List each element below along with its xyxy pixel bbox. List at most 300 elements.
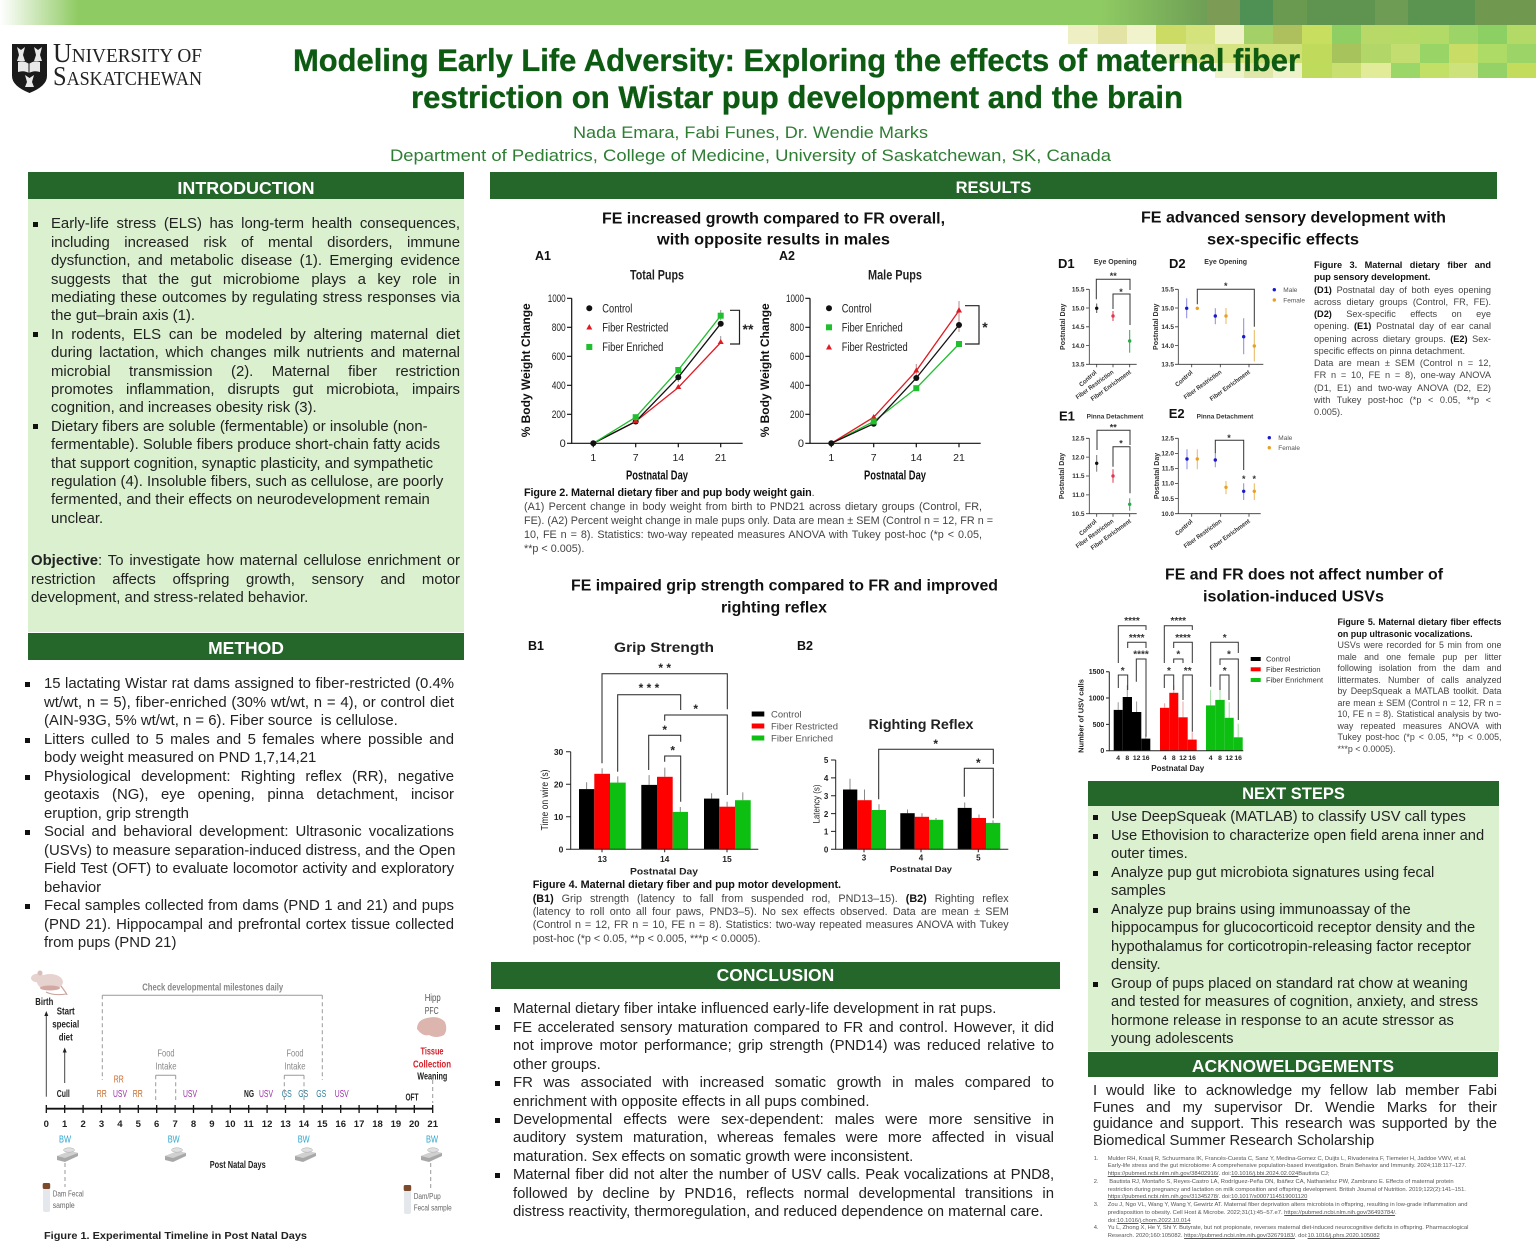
chart: A1 total pups: 0 <box>560 438 566 450</box>
chart: B2 righting reflex: 5 <box>824 756 829 765</box>
text: introduction bullets: unclear. <box>51 511 103 527</box>
chart: A1 total pups: Total Pups <box>630 266 684 282</box>
chart: USV calls: ** <box>1184 666 1192 677</box>
timeline arrows and labels: Birth <box>35 996 53 1008</box>
logo: University of Saskatchewan <box>12 38 202 93</box>
timeline arrows and labels: Intake <box>156 1060 177 1072</box>
text: introduction bullets: suggests that the gut microbiome plays a key role in <box>51 272 460 288</box>
chart: D1 eye opening: * <box>1119 287 1123 297</box>
timeline arrows and labels: BW <box>298 1134 310 1146</box>
heading: introduction: INTRODUCTION <box>177 178 315 198</box>
text: conclusion bullets: other groups. <box>513 1057 601 1073</box>
chart: B2 righting reflex: 5 <box>976 854 981 862</box>
chart: B1 grip strength: * <box>693 702 698 716</box>
chart: A1 total pups: % Body Weight Change <box>521 303 533 437</box>
caption: figure 5: 10, FE n = 8). Statistical analysis by two- <box>1338 709 1502 719</box>
timeline day numbers: 13 <box>280 1119 291 1130</box>
timeline arrows and labels: Fecal sample <box>414 1202 452 1212</box>
timeline arrows and labels: RR <box>133 1088 143 1100</box>
chart: B1 grip strength: * * <box>658 661 671 675</box>
chart: A2 male pups: 800 <box>790 322 804 334</box>
chart: A2 male pups: 0 <box>798 438 804 450</box>
chart: B1 grip strength: Time on wire (s) <box>539 770 551 830</box>
chart: USV calls: Control <box>1266 654 1291 664</box>
chart: A2 male pups: 200 <box>790 409 804 421</box>
chart: B2 righting reflex: Postnatal Day <box>890 864 952 874</box>
text: introduction bullets: mediating these outcomes by regulating stress responses via <box>51 290 460 306</box>
chart: B1 grip strength: Fiber Restricted <box>771 721 838 732</box>
chart: USV calls: **** <box>1129 633 1145 644</box>
timeline arrows and labels: Food <box>286 1048 304 1060</box>
chart: E1 pinna detachment: Control <box>1078 518 1099 538</box>
chart: A1 total pups: 21 <box>715 452 727 464</box>
timeline day numbers: 21 <box>427 1119 439 1130</box>
text: next steps bullets: hypothalamus for corticotropin-releasing factor receptor <box>1111 939 1471 955</box>
chart: B1 grip strength: 20 <box>554 780 564 790</box>
timeline arrows and labels: USV <box>259 1088 273 1100</box>
text: references: Mulder RH, Krasij R, Schuurmans IK, Francés-Cuesta C, Sanz Y, Medina-Gomez C, Duijts L, Rivadeneira F, Tiemeier H, Jaddoe VWV, et al. <box>1108 1156 1466 1162</box>
heading: introduction <box>28 172 464 199</box>
text: next steps bullets: density. <box>1111 957 1161 973</box>
text: method bullets: Field Test (OFT) to evaluate locomotor activity and exploratory <box>44 861 454 877</box>
chart: B1 grip strength: 0 <box>559 844 564 854</box>
caption: figure 3: across dietary groups (Control, FR, FE). <box>1314 297 1491 307</box>
chart: E1 pinna detachment: Fiber Restriction <box>1075 518 1115 550</box>
caption: figure 2: 10, FE n = 8). Statistics: two-way repeated measures ANOVA with Tukey post-hoc (*p < 0.05, <box>524 529 982 541</box>
chart: B1 grip strength: * <box>662 723 667 737</box>
text: next steps bullets: hippocampus for glucocorticoid receptor density and the <box>1111 920 1475 936</box>
chart: A2 male pups: A2 <box>779 249 795 263</box>
text: introduction bullets: microbial transmission (2). Maternal fiber restriction <box>51 364 460 380</box>
logo: University of Saskatchewan: SASKATCHEWAN <box>53 61 202 91</box>
chart: A1 total pups: Fiber Enriched <box>602 342 663 354</box>
chart: E2 pinna detachment by sex: Female <box>1278 445 1300 452</box>
text: acknowledgements: Biomedical Summer Research Scholarship <box>1093 1133 1374 1149</box>
chart: D1 eye opening <box>1058 256 1137 403</box>
chart: D1 eye opening: 15.5 <box>1072 286 1085 294</box>
chart: B2 righting reflex: Righting Reflex <box>868 717 974 732</box>
chart: D2 eye opening by sex: Eye Opening <box>1204 259 1247 266</box>
text: 4. <box>1094 1225 1099 1231</box>
heading: next steps <box>1088 781 1499 806</box>
text: references: Yu L, Zhong X, He Y, Shi Y. Butyrate, but not propionate, reverses maternal diet-induced neurocognitive deficits in offspring. Pharmacological <box>1108 1225 1468 1231</box>
chart: B1 grip strength: 13 <box>598 854 607 864</box>
chart: E2 pinna detachment by sex: 11.0 <box>1162 481 1174 488</box>
timeline arrows and labels: Post Natal Days <box>210 1159 266 1171</box>
chart: A2 male pups: 7 <box>871 452 877 464</box>
subheadings: FE impaired grip strength compared to FR and improved <box>571 578 998 594</box>
chart: A2 male pups: Male Pups <box>868 266 922 282</box>
chart: USV calls: Fiber Restriction <box>1266 665 1321 674</box>
timeline arrows and labels: Collection <box>413 1058 451 1070</box>
timeline arrows and labels: GS <box>282 1088 292 1100</box>
chart: A1 total pups: Control <box>602 304 632 316</box>
chart: B1 grip strength: B1 <box>528 639 544 653</box>
chart: A2 male pups: 1000 <box>786 293 804 305</box>
chart: A1 total pups: 1 <box>590 452 596 464</box>
text: objective <box>31 553 460 606</box>
text: conclusion bullets: auditory system maturation, whereas females were more affected in visual <box>513 1130 1054 1146</box>
panel: introduction <box>28 172 464 632</box>
subheadings: FE advanced sensory development with <box>1141 210 1446 226</box>
text: conclusion bullets: Developmental effects were sex-dependent: males were more sensitive in <box>513 1112 1054 1128</box>
chart: A2 male pups: 21 <box>953 452 965 464</box>
text: conclusion bullets: distress reactivity, thermoregulation, and reduced dependence on maternal care. <box>513 1204 1043 1220</box>
caption: figure 2: **p < 0.005). <box>524 543 584 555</box>
chart: USV calls: Postnatal Day <box>1151 764 1205 773</box>
chart: D2 eye opening by sex: 14.5 <box>1161 324 1174 331</box>
timeline arrows and labels: Dam/Pup <box>414 1191 441 1201</box>
text: references: https://pubmed.ncbi.nlm.nih.gov/31345278/. doi:10.1017/s0007114519001120 <box>1108 1194 1307 1200</box>
chart: B2 righting reflex: 1 <box>824 828 829 836</box>
chart: A1 total pups: Postnatal Day <box>626 468 688 482</box>
text: next steps bullets: outer times. <box>1111 846 1188 862</box>
text: method bullets: Litters culled to 5 males and 5 females where possible and <box>44 732 454 748</box>
subheadings: FE increased growth compared to FR overall, <box>602 210 945 228</box>
text: method bullets <box>25 676 455 951</box>
chart: A1 total pups: A1 <box>535 249 551 263</box>
chart: A1 total pups: 400 <box>552 380 566 392</box>
timeline axis <box>46 1105 433 1113</box>
text: conclusion bullets: enrichment with opposite effects in all pups combined. <box>513 1094 869 1110</box>
chart: D1 eye opening: ** <box>1110 271 1117 281</box>
chart: E2 pinna detachment by sex: 10.0 <box>1161 511 1174 518</box>
chart: USV calls: 8 <box>1125 755 1129 762</box>
timeline arrows and labels: Check developmental milestones daily <box>142 982 283 994</box>
chart: E2 pinna detachment by sex: Postnatal Day <box>1154 453 1161 499</box>
text: introduction bullets: promotes inflammation, disrupts gut microbiota, impairs <box>51 382 460 398</box>
chart: D1 eye opening: Eye Opening <box>1094 259 1137 266</box>
chart: USV calls: * <box>1223 633 1227 644</box>
chart: USV calls: 4 <box>1116 755 1120 762</box>
chart: D2 eye opening by sex: Fiber Restriction <box>1183 369 1223 401</box>
timeline arrows and labels: GS <box>298 1088 308 1100</box>
chart: E1 pinna detachment: ** <box>1110 422 1117 432</box>
caption: figure 1: Figure 1. Experimental Timeline in Post Natal Days <box>44 1230 307 1242</box>
timeline arrows and labels: Cull <box>57 1088 70 1100</box>
chart: A2 male pups: 14 <box>910 452 922 464</box>
timeline day numbers: 2 <box>80 1119 86 1130</box>
text: introduction bullets: during lactation, which changes milk nutrients and maternal <box>51 345 460 361</box>
chart: B1 grip strength: Grip Strength <box>614 640 714 655</box>
timeline day numbers: 8 <box>191 1119 196 1130</box>
text: method bullets: Fecal samples collected from dams (PND 1 and 21) and pups <box>44 898 454 914</box>
chart: E1 pinna detachment: 12.5 <box>1072 436 1085 442</box>
timeline day numbers: 16 <box>335 1119 346 1130</box>
caption: figure 4 <box>533 879 1009 945</box>
timeline arrows and labels: USV <box>183 1088 197 1100</box>
chart: A2 male pups: 1 <box>828 452 834 464</box>
chart: B2 righting reflex: Latency (s) <box>812 784 822 824</box>
chart: A1 total pups: Fiber Restricted <box>602 322 668 334</box>
timeline arrows and labels: PFC <box>425 1005 439 1017</box>
timeline day numbers: 10 <box>225 1119 236 1130</box>
timeline arrows and labels: RR <box>97 1088 107 1100</box>
chart: A1 total pups: 1000 <box>548 293 566 305</box>
caption: figure 4: (Control n = 12, FR n = 10, FE n = 8). Statistics: two-way repeated measures ANOVA with Tukey <box>533 919 1009 931</box>
panel: next steps <box>1088 781 1499 1051</box>
caption: figure 5: ***p < 0.0005). <box>1338 744 1395 754</box>
chart: A1 total pups: 800 <box>552 322 566 334</box>
caption: figure 2: (A1) Percent change in body weight from birth to PND21 across dietary groups (Control, FR, <box>524 501 982 513</box>
chart: B2 righting reflex: 0 <box>824 846 829 854</box>
chart: D1 eye opening: 14.0 <box>1072 343 1085 350</box>
text: objective: Objective: To investigate how maternal cellulose enrichment or <box>31 553 460 569</box>
timeline arrows and labels: Dam Fecal <box>53 1188 84 1198</box>
text: next steps bullets: Use Ethovision to characterize open field arena inner and <box>1111 828 1484 844</box>
caption: figure 5: are mean ± SEM (Control n = 12, FR n = <box>1338 698 1502 708</box>
text: references: Bautista RJ, Montaño S, Reyes-Castro LA, Rodríguez-Peña ON, Ibáñez CA, Nathanielsz PW, Zambrano E. Effects of maternal protein <box>1109 1179 1454 1185</box>
caption: figure 3: specific effects on pinna detachment. <box>1314 346 1465 356</box>
chart: B2 righting reflex: 4 <box>919 854 924 862</box>
chart: D1 eye opening: 14.5 <box>1072 324 1085 331</box>
caption: figure 5: Tukey post-hoc (*p < 0.05, **p < 0.005, <box>1338 732 1502 742</box>
timeline arrows and labels: OFT <box>406 1092 419 1104</box>
text: introduction bullets: Dietary fibers are soluble (fermentable) or insoluble (non- <box>51 419 428 435</box>
chart: E2 pinna detachment by sex: * <box>1227 433 1231 443</box>
caption: figure 3: (D1, E1) and two-way ANOVA (D2, E2) <box>1314 382 1491 392</box>
chart: D2 eye opening by sex: Fiber Enrichment <box>1209 368 1252 403</box>
authors and affiliation: Nada Emara, Fabi Funes, Dr. Wendie Marks <box>573 123 928 142</box>
text: references: Early-life stress and the gut microbiome: A comprehensive population-based investigation. Brain Behavior and Immunity. 2024;118:117–127. <box>1108 1163 1466 1169</box>
chart: USV calls: * <box>1223 666 1227 677</box>
timeline arrows and labels: RR <box>114 1074 124 1086</box>
chart: A2 male pups: Fiber Enriched <box>842 322 903 334</box>
chart: USV calls: * <box>1176 649 1180 660</box>
caption: figure 5 <box>1338 617 1502 754</box>
chart: USV calls: 1000 <box>1089 696 1104 702</box>
timeline arrows and labels: BW <box>426 1134 438 1146</box>
chart: D1 eye opening: Control <box>1078 369 1099 389</box>
timeline arrows and labels: NG <box>244 1088 254 1100</box>
chart: D2 eye opening by sex <box>1153 256 1305 403</box>
authors and affiliation <box>390 123 1112 165</box>
chart: E2 pinna detachment by sex: Pinna Detachment <box>1197 414 1254 420</box>
heading: results <box>490 172 1497 199</box>
chart: E1 pinna detachment <box>1059 408 1144 552</box>
chart: USV calls: 500 <box>1093 722 1104 729</box>
timeline day numbers: 7 <box>172 1119 178 1130</box>
text: method bullets: behavior <box>44 880 101 896</box>
chart: USV calls: 8 <box>1218 755 1222 762</box>
chart: D2 eye opening by sex: Male <box>1283 287 1298 294</box>
chart: B2 righting reflex: 3 <box>824 792 829 801</box>
subheadings: sex-specific effects <box>1207 232 1359 248</box>
chart: D2 eye opening by sex: Control <box>1174 369 1195 389</box>
text: introduction bullets: cognition, and increases obesity risk (3). <box>51 400 317 416</box>
chart: E2 pinna detachment by sex: 11.5 <box>1162 466 1174 472</box>
caption: figure 3: (D2) Sex-specific effects on eye <box>1314 309 1491 319</box>
heading: conclusion <box>491 962 1060 988</box>
authors and affiliation: Department of Pediatrics, College of Medicine, University of Saskatchewan, SK, Canada <box>390 146 1112 165</box>
caption: figure 5: on pup ultrasonic vocalizations. <box>1338 628 1473 638</box>
timeline day numbers: 15 <box>317 1119 328 1130</box>
timeline day numbers: 4 <box>117 1119 123 1130</box>
chart: E1 pinna detachment: E1 <box>1059 408 1075 424</box>
milestone brackets <box>65 995 433 1188</box>
chart: USV calls: **** <box>1133 649 1149 660</box>
heading: method: METHOD <box>208 638 284 658</box>
chart: A2 male pups: * <box>982 319 988 335</box>
text: method bullets: (USVs) to measure separation-induced distress, and the Open <box>44 843 455 859</box>
chart: USV calls: **** <box>1124 616 1140 627</box>
chart: B2 righting reflex: * <box>933 737 938 751</box>
timeline arrows and labels: USV <box>335 1088 349 1100</box>
chart: E2 pinna detachment by sex <box>1154 406 1300 552</box>
heading: conclusion: CONCLUSION <box>717 964 834 984</box>
chart: D1 eye opening: D1 <box>1058 256 1075 271</box>
text: references: restriction during pregnancy and lactation on milk composition and offspring development. British Journal of Nutrition. 2019;122(2):141–151. <box>1108 1187 1466 1193</box>
mosaic decoration <box>1068 25 1536 78</box>
chart: B1 grip strength: 14 <box>660 854 670 864</box>
text: 2. <box>1094 1179 1099 1185</box>
text: method bullets: geotaxis (NG), eye opening, pinna detachment, incisor <box>44 787 454 803</box>
text: next steps bullets: Use DeepSqueak (MATLAB) to classify USV call types <box>1111 809 1466 825</box>
text: 3. <box>1094 1202 1099 1208</box>
text: acknowledgements: Funes and my supervisor Dr. Wendie Marks for their <box>1093 1100 1497 1116</box>
caption: figure 4: (B1) Grip strength (latency to fall from suspended rod, PND13–15). (B2) Righting reflex <box>533 893 1009 905</box>
heading: method <box>28 633 464 660</box>
chart: USV calls: 4 <box>1163 755 1167 762</box>
title <box>293 42 1300 115</box>
chart: A2 male pups: Control <box>842 304 872 316</box>
caption: figure 3: opening across dietary groups. (E2) Sex- <box>1314 334 1491 344</box>
text: introduction bullets: Early-life stress (ELS) has long-term health consequences, <box>51 216 460 232</box>
text: method bullets: Social and behavioral development: Ultrasonic vocalizations <box>44 824 454 840</box>
caption: figure 3: (D1) Postnatal day of both eyes opening <box>1314 284 1491 294</box>
text: introduction bullets: fermented, and their effects on neurodevelopment remain <box>51 492 430 508</box>
timeline arrows and labels: BW <box>168 1134 180 1146</box>
text: method bullets: body weight measured on PND 1,7,14,21 <box>44 750 316 766</box>
timeline day numbers: 5 <box>136 1119 142 1130</box>
chart: E2 pinna detachment by sex: 12.5 <box>1161 436 1174 442</box>
chart: E2 pinna detachment by sex: Male <box>1278 435 1293 442</box>
text: next steps bullets: and tested for measures of cognition, anxiety, and stress <box>1111 994 1478 1010</box>
chart: USV calls: 16 <box>1142 755 1150 762</box>
chart: E1 pinna detachment: Postnatal Day <box>1059 453 1066 499</box>
chart: D2 eye opening by sex: 14.0 <box>1161 343 1174 350</box>
chart: USV calls: **** <box>1171 616 1186 627</box>
logo: University of Saskatchewan: UNIVERSITY OF <box>53 38 202 68</box>
chart: USV calls: 12 <box>1133 755 1141 762</box>
timeline day numbers: 9 <box>209 1119 215 1130</box>
chart: A2 male pups: Fiber Restricted <box>842 342 908 354</box>
chart: D2 eye opening by sex: 15.5 <box>1161 286 1174 294</box>
chart: USV calls: Fiber Enrichment <box>1266 676 1324 684</box>
chart: B1 grip strength: * <box>670 744 675 758</box>
chart: D1 eye opening: 15.0 <box>1072 306 1085 312</box>
title: Modeling Early Life Adversity: Exploring the effects of maternal fiber <box>293 42 1300 78</box>
caption: figure 4: (latency to roll onto all four paws, PND3–5). No sex effects observed. Data are mean ± SEM <box>533 906 1009 918</box>
text: references: doi:10.1016/j.chom.2022.10.014 <box>1108 1218 1191 1224</box>
timeline arrows and labels: Start <box>57 1006 75 1018</box>
text: method bullets: eruption, grip strength <box>44 806 189 822</box>
timeline arrows and labels: GS <box>316 1088 326 1100</box>
chart: USV calls: 12 <box>1179 755 1187 762</box>
chart: D1 eye opening: Fiber Restriction <box>1075 369 1115 401</box>
chart: USV calls: 8 <box>1172 755 1176 762</box>
heading: results: RESULTS <box>956 179 1031 197</box>
chart: USV calls: 4 <box>1209 755 1213 762</box>
text: conclusion bullets: Maternal fiber did not alter the number of USV calls. Peak vocalizations at PND8, <box>513 1167 1054 1183</box>
text: next steps bullets: Analyze pup gut microbiota signatures using fecal <box>1111 865 1434 881</box>
chart: B1 grip strength: * * * <box>639 681 660 695</box>
text: acknowledgements <box>1093 1083 1497 1149</box>
text: conclusion bullets: FR was associated with increased somatic growth in males compared to <box>513 1075 1054 1091</box>
chart: A1 total pups: ** <box>743 321 754 337</box>
chart: USV calls: 0 <box>1100 748 1104 755</box>
timeline day numbers: 17 <box>354 1119 364 1130</box>
chart: A2 male pups <box>760 249 988 482</box>
timeline arrows and labels: Tissue <box>420 1046 444 1058</box>
caption: figure 3: FR n = 10, FE n = 8), one-way ANOVA <box>1314 370 1491 380</box>
timeline arrows and labels <box>35 982 452 1212</box>
chart: D2 eye opening by sex: Female <box>1283 297 1305 304</box>
timeline arrows and labels: special <box>52 1018 79 1030</box>
heading: acknowledgements <box>1088 1052 1498 1077</box>
timeline day numbers: 1 <box>62 1119 68 1130</box>
chart: USV calls: Number of USV calls <box>1076 679 1085 753</box>
chart: B2 righting reflex: 2 <box>824 810 829 819</box>
chart: A1 total pups: 200 <box>552 409 566 421</box>
text: introduction bullets <box>33 216 460 527</box>
text: method bullets: (PND 21). Hippocampal and prefrontal cortex tissue collected <box>44 917 454 933</box>
caption: figure 5: following isolation from the dam and <box>1338 663 1502 673</box>
chart: B1 grip strength: 30 <box>554 747 564 757</box>
chart: B1 grip strength: Control <box>771 709 802 720</box>
top banner <box>0 0 1536 25</box>
text: conclusion bullets: not improve motor performance; grip strength (PND14) was reduced relative to <box>513 1038 1054 1054</box>
caption: figure 3: opening. (E1) Postnatal day of ear canal <box>1314 321 1491 331</box>
chart: D1 eye opening: Fiber Enrichment <box>1090 368 1133 403</box>
chart: E2 pinna detachment by sex: E2 <box>1169 406 1185 421</box>
chart: A2 male pups: % Body Weight Change <box>760 303 772 437</box>
chart: B1 grip strength: Postnatal Day <box>630 866 699 878</box>
heading: acknowledgements: ACKNOWELDGEMENTS <box>1192 1056 1394 1076</box>
timeline arrows and labels: sample <box>53 1200 75 1210</box>
chart: USV calls: 16 <box>1234 755 1242 762</box>
timeline day numbers <box>44 1119 439 1130</box>
timeline day numbers: 6 <box>154 1119 159 1130</box>
timeline arrows and labels: USV <box>113 1088 127 1100</box>
chart: B1 grip strength: 15 <box>722 854 732 864</box>
text: next steps bullets: young adolescents <box>1111 1031 1233 1047</box>
chart: E2 pinna detachment by sex: 10.5 <box>1161 496 1174 503</box>
chart: E1 pinna detachment: 10.5 <box>1072 511 1085 518</box>
text: method bullets: wt/wt, n = 5), fiber-enriched (30% wt/wt, n = 4), or control diet <box>44 695 454 711</box>
chart: A2 male pups: 600 <box>790 351 804 363</box>
chart: D2 eye opening by sex: 13.5 <box>1161 362 1174 368</box>
heading: next steps: NEXT STEPS <box>1242 785 1345 803</box>
caption: figure 2 <box>524 487 993 555</box>
timeline day numbers: 18 <box>372 1119 383 1130</box>
chart: A1 total pups <box>521 249 754 482</box>
caption: figure 2: FE). (A2) Percent weight change in male pups only. Data are mean ± SEM (Control n = 12, FR n = <box>524 515 993 527</box>
timeline day numbers: 20 <box>409 1119 420 1130</box>
text: introduction bullets: regulation (4). Insoluble fibers, such as cellulose, are poorly <box>51 474 443 490</box>
text: references: Zou J, Ngo VL, Wang Y, Wang Y, Gewirtz AT. Maternal fiber deprivation alters microbiota in offspring, resulting in low-grade inflammation and <box>1108 1202 1468 1208</box>
bars B1 <box>579 768 751 849</box>
chart: E1 pinna detachment: Fiber Enrichment <box>1090 517 1133 552</box>
text: references <box>1094 1156 1468 1239</box>
caption: figure 3: Figure 3. Maternal dietary fiber and <box>1314 260 1491 270</box>
icons: scales <box>57 1148 442 1162</box>
chart: B1 grip strength: Fiber Enriched <box>771 733 833 744</box>
text: objective: restriction affects offspring growth, sensory and motor <box>31 572 460 588</box>
text: conclusion bullets: FE accelerated sensory maturation compared to FR and control. However, it did <box>513 1020 1054 1036</box>
caption: figure 5: male and one female pup per litter <box>1338 652 1502 662</box>
chart: A1 total pups: 600 <box>552 351 566 363</box>
